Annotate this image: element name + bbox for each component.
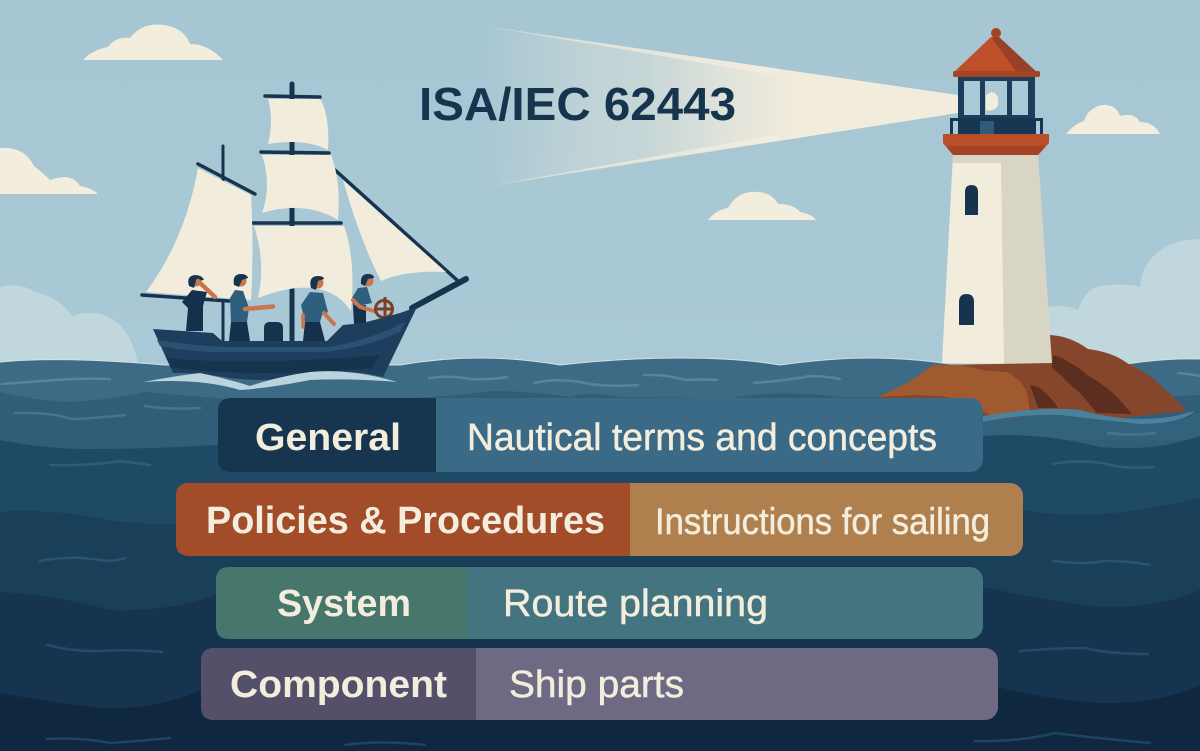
tower windows <box>959 185 978 325</box>
row: General <box>218 398 983 472</box>
description: Nautical terms and concepts: Nautical terms and concepts <box>467 417 937 459</box>
rock island <box>878 335 1187 420</box>
row: System <box>216 567 983 639</box>
description: Route planning: Route planning <box>503 583 768 625</box>
label: Policies & Procedures: Policies & Procedures <box>206 500 605 542</box>
railing <box>950 118 1043 134</box>
sea lower bands <box>0 435 1200 751</box>
wave highlights, upper sea <box>2 373 1200 386</box>
sky background <box>0 0 1200 370</box>
lantern room <box>958 77 1035 119</box>
description: Ship parts: Ship parts <box>509 664 684 706</box>
tower <box>942 155 1052 364</box>
label: General: General <box>255 417 401 459</box>
hull <box>153 307 417 380</box>
deck hatch <box>264 322 283 341</box>
gallery base <box>943 134 1049 155</box>
title: ISA/IEC 62443 <box>419 78 736 130</box>
crew member shading eyes <box>182 275 215 331</box>
label: System: System <box>277 583 411 625</box>
row: Policies & Procedures <box>176 483 1023 556</box>
masts and rigging <box>142 84 458 340</box>
crew <box>182 274 374 341</box>
sails <box>146 99 446 311</box>
ship's wheel <box>375 297 393 318</box>
wave in front of the rock <box>870 409 1200 751</box>
label: Component: Component <box>230 664 447 706</box>
lighthouse <box>942 28 1052 364</box>
cream clouds <box>0 25 1160 220</box>
light beam <box>484 26 958 187</box>
wave highlights, lower sea <box>15 406 1155 745</box>
pale background clouds <box>0 239 1200 364</box>
crew member at the helm <box>352 274 374 324</box>
crew member at centre <box>301 276 334 341</box>
bow wave <box>143 371 397 390</box>
roof <box>953 28 1040 77</box>
ship <box>142 84 466 390</box>
crew member pointing <box>229 274 273 341</box>
bowsprit <box>412 279 466 308</box>
sea upper bands <box>0 358 1200 751</box>
description: Instructions for sailing: Instructions for sailing <box>655 501 990 542</box>
row: Component <box>201 648 998 720</box>
